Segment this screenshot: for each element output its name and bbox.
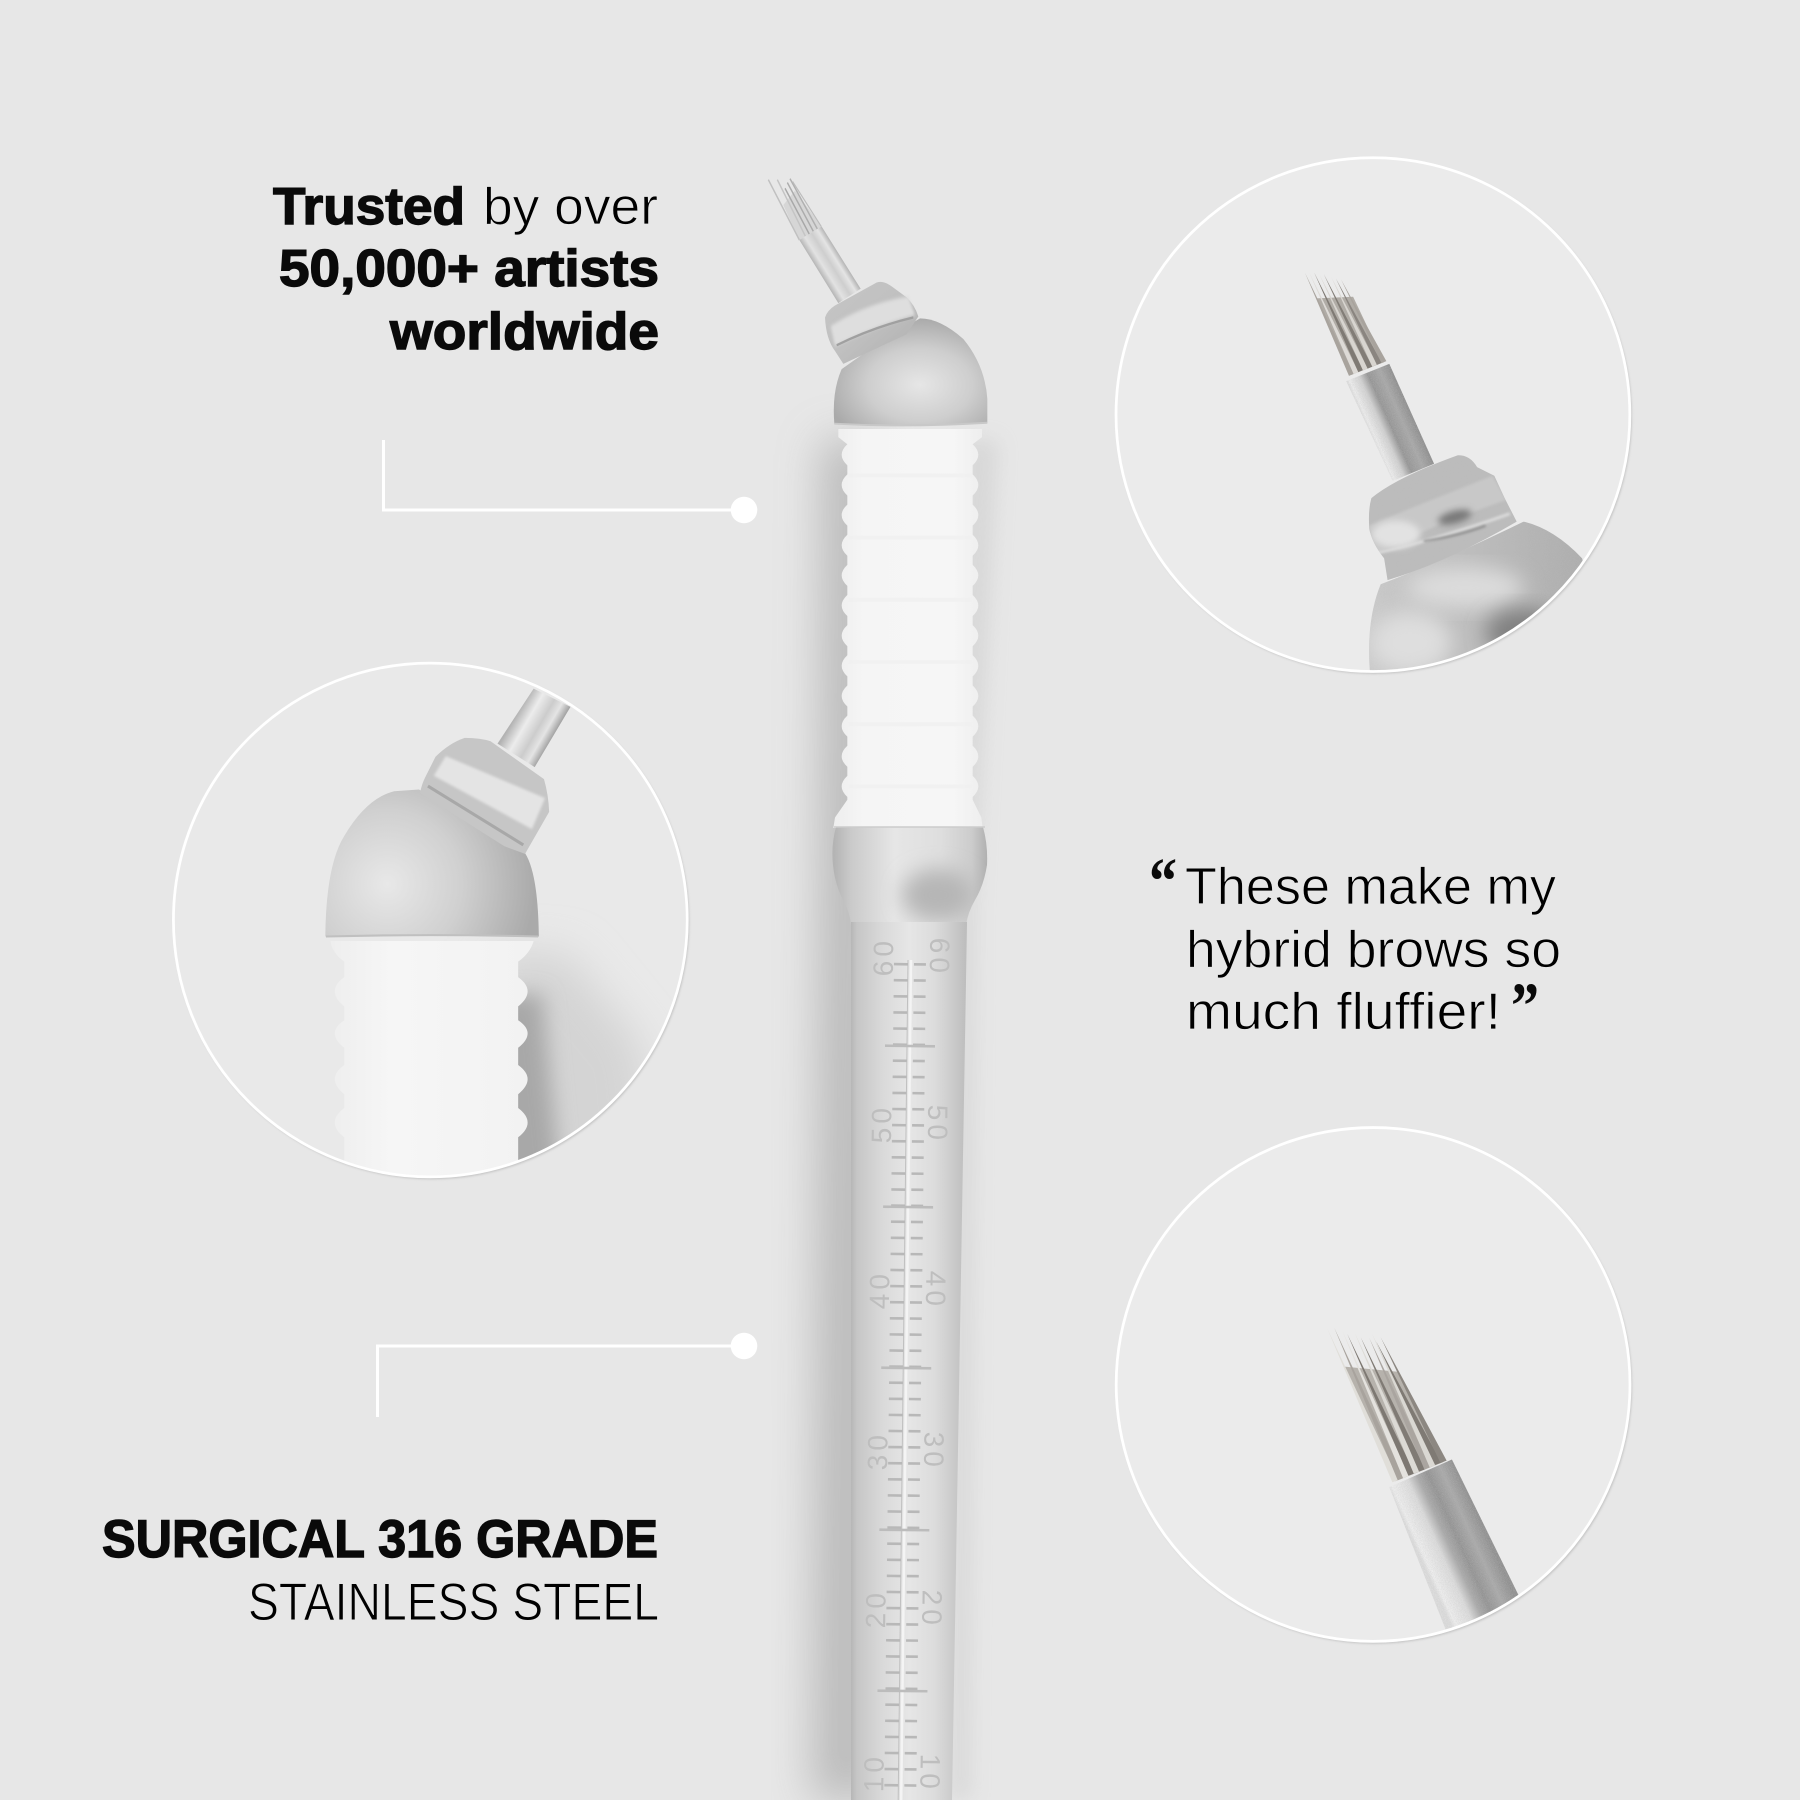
needle tube bbox=[497, 689, 571, 767]
connector line top bbox=[384, 440, 757, 523]
pen shaft bbox=[851, 922, 967, 1800]
infographic canvas bbox=[102, 156, 1633, 1800]
ruler labels right bbox=[914, 938, 955, 1793]
ruler labels left: 50 bbox=[866, 1104, 897, 1143]
ruler labels right: 30 bbox=[918, 1432, 949, 1471]
testimonial quote: These make my bbox=[1185, 858, 1556, 916]
testimonial quote: much fluffier! bbox=[1186, 983, 1501, 1041]
pen tip: needle and collar bbox=[768, 179, 987, 828]
callout top: trusted by artists: 50,000+ artists bbox=[279, 240, 659, 298]
dome bbox=[1369, 522, 1583, 670]
ribbed white grip bbox=[833, 429, 983, 828]
ruler labels right: 10 bbox=[914, 1754, 946, 1793]
dome bbox=[325, 789, 539, 937]
ruler labels left: 60 bbox=[868, 937, 899, 976]
collar bbox=[825, 282, 918, 364]
callout top: trusted by artists: Trusted bbox=[273, 178, 465, 236]
needle fan bbox=[1327, 1328, 1447, 1482]
needle tube bbox=[1390, 1460, 1518, 1630]
connector line bottom bbox=[378, 1333, 757, 1417]
collar bbox=[420, 738, 549, 854]
main pen bbox=[768, 179, 987, 1800]
callout bottom: surgical steel: SURGICAL 316 GRADE bbox=[102, 1510, 658, 1569]
testimonial quote: hybrid brows so bbox=[1186, 921, 1561, 979]
ruler labels right: 50 bbox=[922, 1105, 953, 1144]
callout top: trusted by artists: by over bbox=[483, 178, 658, 236]
ruler labels left: 20 bbox=[860, 1589, 892, 1628]
ruler labels left: 30 bbox=[862, 1431, 893, 1470]
dome bbox=[834, 318, 987, 425]
ruler labels right: 40 bbox=[920, 1271, 951, 1310]
engraved ruler bbox=[858, 937, 955, 1800]
pen drop shadow bbox=[812, 440, 998, 1800]
callout top: trusted by artists: worldwide bbox=[389, 303, 659, 361]
callout bottom: surgical steel bbox=[102, 1510, 659, 1632]
grip shadow bbox=[518, 948, 646, 1160]
circle detail: needle close-up bbox=[1116, 1128, 1632, 1661]
ruler labels right: 60 bbox=[924, 938, 955, 977]
needle tube bbox=[799, 227, 861, 303]
circle detail: needle and collar bbox=[1116, 158, 1632, 694]
testimonial quote: “ bbox=[1149, 845, 1177, 918]
needle tube bbox=[1346, 364, 1434, 481]
ruler labels right: 20 bbox=[916, 1590, 948, 1629]
ruler labels left: 40 bbox=[864, 1270, 895, 1309]
collar bbox=[1369, 455, 1516, 580]
ribbed grip bbox=[354, 941, 534, 1176]
pen neck bbox=[832, 827, 987, 925]
callout bottom: surgical steel: STAINLESS STEEL bbox=[248, 1573, 659, 1632]
needle fan bbox=[1305, 273, 1386, 376]
circle detail: dome and ribbed grip bbox=[173, 663, 689, 1208]
testimonial quote: ” bbox=[1511, 970, 1539, 1043]
ruler labels left bbox=[858, 937, 899, 1792]
testimonial quote bbox=[1149, 845, 1561, 1043]
needle bundle bbox=[768, 179, 822, 240]
ruler labels left: 10 bbox=[858, 1753, 890, 1792]
callout top: trusted by artists bbox=[273, 178, 659, 361]
